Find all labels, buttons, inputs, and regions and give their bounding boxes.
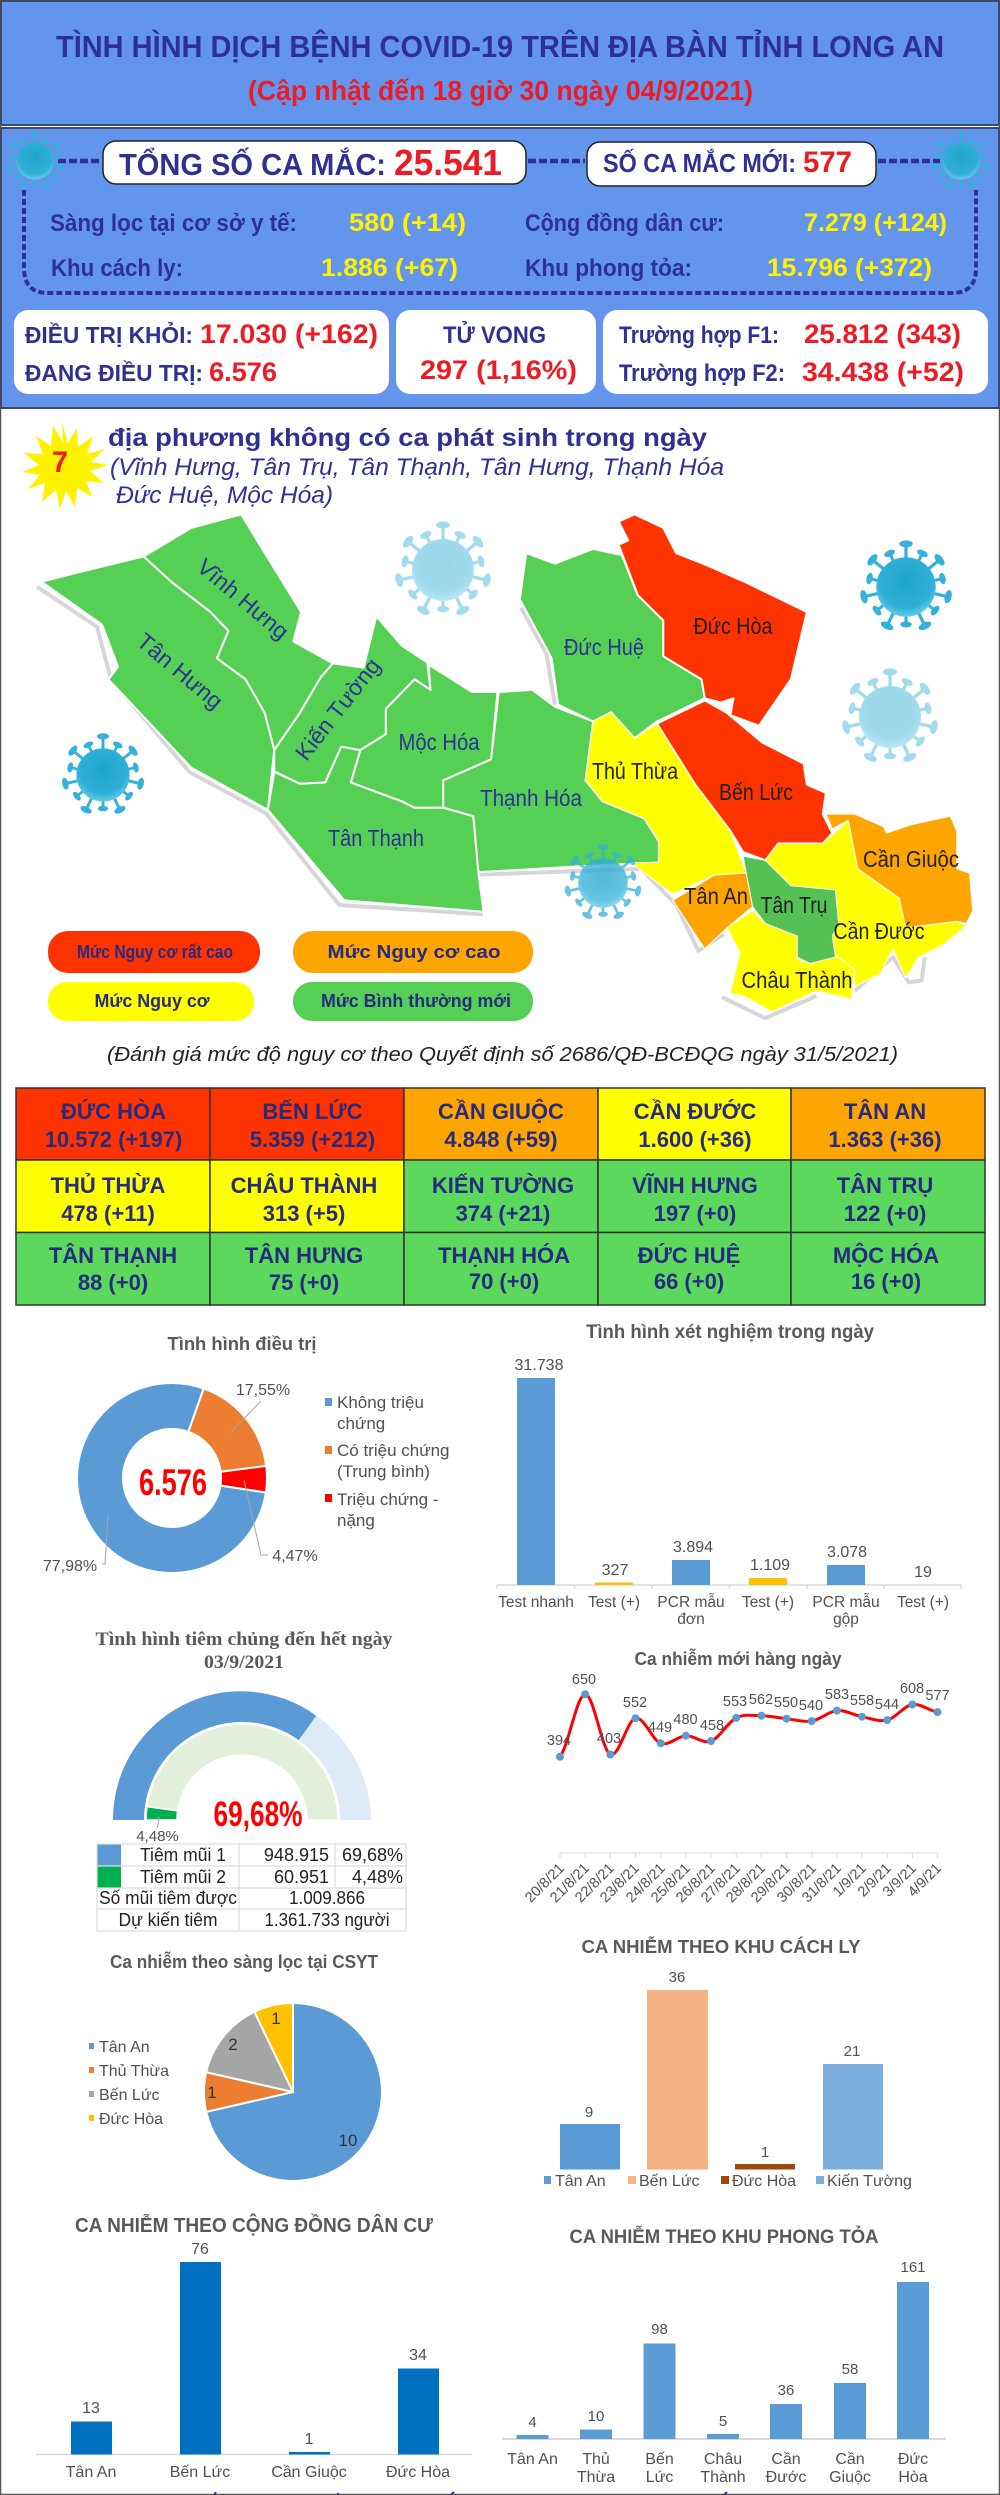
table: cases by locality: TÂN TRỤ [837,1173,933,1198]
chart title: CA NHIỄM THEO KHU CÁCH LY [582,1936,861,1957]
F1 F2 box: 34.438 (+52) [802,357,964,387]
chart: daily testing bars [497,1322,961,1628]
total cases box [103,141,526,184]
chart: vaccination gauge: 69,68% [214,1795,302,1834]
legend: Tân An [99,2039,150,2056]
chart: daily new cases line: 394 [547,1733,571,1749]
chart: daily testing bars: 1.109 [750,1557,790,1574]
icon: virus over map [564,844,642,920]
chart: lockdown area cases: 5 [719,2413,727,2430]
breakdown stats: 15.796 (+372) [767,254,932,282]
table: vaccination figures: 69,68% [342,1845,403,1865]
chart: lockdown area cases: Giuộc [829,2469,871,2486]
deaths box [396,310,596,394]
total cases box: TỔNG SỐ CA MẮC: [119,146,386,182]
legend: risk levels [48,931,533,1021]
heading: localities without new cases: địa phương không có ca phát sinh trong ngày [108,424,707,452]
table: cases by locality: CHÂU THÀNH [231,1173,377,1198]
legend: Bến Lức [99,2087,160,2104]
chart: daily new cases line: 458 [700,1718,724,1734]
map labels: Tân Trụ [760,892,828,918]
title: TÌNH HÌNH DỊCH BỆNH COVID-19 TRÊN ĐỊA BÀN TỈNH LONG AN [56,28,944,64]
chart: community cases: Tân An [66,2464,116,2481]
table: vaccination figures: 1.361.733 người [264,1910,390,1930]
table: cases by locality: KIẾN TƯỜNG [432,1173,574,1198]
map labels: Bến Lức [719,779,793,805]
chart: daily new cases line: 23/8/21 [597,1861,643,1906]
map labels: Châu Thành [742,967,852,993]
legend: Kiến Tường [827,2173,912,2190]
chart: treatment status donut: 4,47% [272,1548,318,1565]
table: vaccination figures: Tiêm mũi 1 [140,1845,226,1865]
table: cases by locality: 4.848 (+59) [444,1127,558,1152]
text: list of localities [110,454,724,509]
chart: daily new cases line: 552 [623,1695,647,1711]
legend: risk levels: Mức Nguy cơ rất cao [77,942,233,962]
chart: daily new cases line: 28/8/21 [723,1861,769,1906]
map labels: Tân An [684,883,748,909]
chart: daily new cases line: 558 [850,1693,874,1709]
table: cases by locality: MỘC HÓA [833,1243,939,1268]
chart: quarantine area cases: 9 [585,2104,593,2121]
deaths box: TỬ VONG [443,320,546,349]
legend [544,2173,912,2190]
legend: nặng [337,1511,375,1530]
chart: daily testing bars: Test (+) [588,1594,640,1611]
recovered box [14,310,389,394]
icon: star with number 7: 7 [52,446,68,479]
chart: lockdown area cases: Cần [771,2451,801,2468]
breakdown stats: Cộng đồng dân cư: [525,210,724,237]
region: Châu Thành [727,911,855,1012]
icon: virus light right [841,668,939,764]
chart: daily new cases line: 4/9/21 [905,1861,945,1900]
icon: virus dark left [61,733,145,815]
table: vaccination figures: Số mũi tiêm được [99,1888,237,1908]
table: vaccination figures [97,1844,406,1931]
chart: daily testing bars: 3.894 [673,1539,713,1556]
table: vaccination figures: Tiêm mũi 2 [140,1867,226,1887]
chart: quarantine area cases: 1 [761,2144,769,2161]
chart: vaccination gauge: 4,48% [136,1828,179,1845]
legend [89,2039,169,2128]
chart: screening cases pie: 1 [207,2083,217,2102]
deaths box: 297 (1,16%) [420,355,577,385]
recovered box: ĐIỀU TRỊ KHỎI: [25,320,193,348]
chart: community cases: Cần Giuộc [271,2464,347,2481]
new cases box: SỐ CA MẮC MỚI: [603,148,796,178]
table: cases by locality: 66 (+0) [654,1269,724,1294]
new cases box: 577 [803,146,852,179]
F1 F2 box: Trường hợp F1: [619,322,779,349]
map labels: Cần Đước [834,918,924,944]
table: cases by locality: 75 (+0) [269,1270,339,1295]
chart: lockdown area cases: 161 [900,2259,926,2276]
breakdown stats: 7.279 (+124) [804,209,947,237]
chart: lockdown area cases: 36 [778,2382,794,2399]
table: cases by locality: TÂN THẠNH [49,1243,177,1268]
chart: community cases: 13 [82,2400,100,2417]
chart: daily new cases line: 577 [925,1688,950,1704]
legend [325,1393,450,1530]
chart: lockdown area cases [502,2226,946,2486]
chart title: Ca nhiễm mới hàng ngày [634,1648,842,1669]
map of Long An [37,514,973,1018]
chart: lockdown area cases: 4 [528,2414,537,2431]
chart title [96,1630,393,1673]
table: cases by locality: 1.600 (+36) [638,1127,752,1152]
table: cases by locality: 10.572 (+197) [45,1127,182,1152]
legend: chứng [337,1414,385,1433]
chart: daily new cases line: 30/8/21 [774,1861,820,1906]
chart: quarantine area cases: 21 [844,2043,860,2060]
header panel [1,1,999,125]
table: cases by locality: 70 (+0) [469,1269,539,1294]
table: cases by locality: CẦN ĐƯỚC [634,1099,756,1124]
icon: virus light top [394,521,492,617]
chart: daily testing bars: 327 [602,1562,628,1579]
chart: daily new cases line: 583 [825,1687,849,1703]
chart title: CA NHIỄM THEO KHU PHONG TỎA [570,2226,879,2248]
chart: daily new cases line: 26/8/21 [673,1861,719,1906]
region: Cần Đước [765,820,966,987]
table: cases by locality: VĨNH HƯNG [632,1173,758,1198]
table: vaccination figures: 4,48% [352,1867,403,1887]
legend: risk levels: Mức Bình thường mới [321,991,511,1011]
region: Cần Giuộc [826,814,973,928]
table: cases by locality: TÂN AN [844,1099,926,1124]
chart: daily testing bars: đơn [677,1611,705,1628]
region: Thạnh Hóa [443,690,659,872]
region: Đức Hòa [619,514,807,726]
recovered box: ĐANG ĐIỀU TRỊ: [25,359,203,386]
chart: daily new cases line: 2/9/21 [855,1861,895,1900]
legend: Không triệu [337,1393,424,1412]
breakdown stats: Khu cách ly: [51,255,183,282]
map labels: Mộc Hóa [398,729,480,755]
chart: lockdown area cases: 58 [842,2361,858,2378]
table: cases by locality: 197 (+0) [654,1201,736,1226]
legend: Có triệu chứng [337,1441,450,1460]
chart: daily new cases line: 24/8/21 [623,1861,669,1906]
chart: daily testing bars: Test nhanh [498,1594,574,1611]
chart title: Ca nhiễm theo sàng lọc tại CSYT [110,1951,378,1972]
chart: daily new cases line: 562 [749,1692,773,1708]
breakdown stats [50,209,947,282]
legend: Tân An [555,2173,606,2190]
breakdown stats: 1.886 (+67) [321,254,458,282]
table: cases by locality: 1.363 (+36) [828,1127,942,1152]
text: list of localities: Đức Huệ, Mộc Hóa) [116,482,333,509]
map labels: Đức Hòa [694,613,773,639]
chart: daily new cases line: 1/9/21 [830,1861,870,1900]
chart: daily testing bars: Test (+) [742,1594,794,1611]
chart: lockdown area cases: 98 [651,2321,668,2338]
chart: daily new cases line: 27/8/21 [698,1861,744,1906]
F1 F2 box: 25.812 (343) [804,319,961,349]
table: cases by locality: TÂN HƯNG [245,1243,363,1268]
chart: treatment status donut: 17,55% [236,1382,290,1399]
chart: daily new cases line: 20/8/21 [522,1861,568,1906]
breakdown stats: Khu phong tỏa: [525,255,692,282]
chart: lockdown area cases: Bến [645,2451,674,2468]
chart: community cases: 76 [191,2241,209,2258]
table: cases by locality: 5.359 (+212) [250,1127,375,1152]
table: cases by locality: 16 (+0) [851,1269,921,1294]
recovered box: 17.030 (+162) [200,319,378,349]
chart: quarantine area cases: 36 [669,1969,685,1986]
chart: daily new cases line [522,1648,950,1906]
chart: treatment status donut: 6.576 [139,1462,207,1503]
region: Thủ Thừa [586,712,746,894]
chart: lockdown area cases: Hòa [898,2469,928,2486]
chart title: Tình hình xét nghiệm trong ngày [586,1322,874,1343]
recovered box: 6.576 [209,357,277,387]
subtitle: (Cập nhật đến 18 giờ 30 ngày 04/9/2021) [248,75,753,106]
region: Vĩnh Hưng [144,514,333,750]
chart: community cases [36,2213,472,2481]
chart: treatment status donut: 77,98% [43,1558,97,1575]
table: cases by locality: 88 (+0) [78,1270,148,1295]
chart: lockdown area cases: Cần [835,2451,865,2468]
chart: treatment status donut [43,1334,450,1575]
F1 F2 box: Trường hợp F2: [619,360,785,387]
chart: lockdown area cases: Châu [704,2451,742,2468]
chart title: 03/9/2021 [204,1653,284,1673]
chart: screening cases pie: 1 [271,2009,281,2028]
map labels: Kiến Tường [290,653,386,765]
icon: virus right [932,132,990,189]
chart: lockdown area cases: Đức [898,2451,928,2468]
table: cases by locality: ĐỨC HÒA [61,1099,166,1124]
chart: community cases: Đức Hòa [386,2464,450,2481]
region: Tân Hưng [41,556,274,810]
chart: lockdown area cases: 10 [588,2408,604,2425]
chart: lockdown area cases: Đước [766,2469,806,2486]
chart: daily new cases line: 403 [597,1731,621,1747]
chart: quarantine area cases [544,1936,912,2190]
table: vaccination figures: 1.009.866 [289,1888,365,1908]
table: cases by locality: THỦ THỪA [51,1173,166,1198]
region: Kiến Tường [274,616,431,784]
chart title: Tình hình tiêm chủng đến hết ngày [96,1630,393,1650]
table: vaccination figures: Dự kiến tiêm [118,1910,218,1930]
table: cases by locality: 122 (+0) [844,1201,926,1226]
new cases box [587,142,876,186]
table: cases by locality [16,1088,985,1305]
chart: daily new cases line: 553 [723,1694,747,1710]
legend: Bến Lức [639,2173,700,2190]
map labels [132,553,959,993]
map labels: Tân Hưng [132,628,228,714]
chart title: CA NHIỄM THEO CỘNG ĐỒNG DÂN CƯ [75,2213,433,2237]
table: cases by locality: THẠNH HÓA [438,1243,570,1268]
table: cases by locality: ĐỨC HUỆ [638,1243,740,1268]
chart: daily new cases line: 480 [673,1712,698,1728]
region: Tân Trụ [743,856,839,963]
icon: virus dark right [859,540,953,632]
map labels: Cần Giuộc [863,846,959,872]
chart: screening cases pie: 10 [339,2131,357,2150]
region: Đức Huệ [520,549,705,738]
chart: community cases: 1 [305,2431,314,2448]
chart: lockdown area cases: Thủ [582,2451,610,2468]
chart: screening cases pie: 2 [228,2035,238,2054]
total cases box: 25.541 [394,142,502,183]
table: cases by locality: 313 (+5) [263,1201,345,1226]
chart: daily testing bars: gộp [833,1611,859,1628]
chart: daily new cases line: 449 [648,1720,672,1736]
table: cases by locality: 478 (+11) [61,1201,155,1226]
chart title: Tình hình điều trị [168,1334,316,1354]
legend: Thủ Thừa [99,2063,169,2080]
chart: daily new cases line: 550 [774,1695,798,1711]
chart: daily new cases line: 544 [875,1697,899,1713]
chart: daily new cases line: 650 [572,1672,596,1688]
map labels: Đức Huệ [564,634,644,660]
region: Tân Thạnh [268,747,483,912]
region: Mộc Hóa [351,665,497,808]
chart: daily new cases line: 608 [900,1681,924,1697]
table: vaccination figures: 948.915 [264,1845,329,1865]
chart: daily new cases line: 31/8/21 [799,1861,845,1906]
legend: Triệu chứng - [337,1490,438,1509]
map labels: Tân Thạnh [328,825,424,851]
breakdown stats: 580 (+14) [349,209,466,237]
chart: daily new cases line: 25/8/21 [648,1861,694,1906]
chart: screening cases pie [89,1951,382,2181]
region: Bến Lức [657,700,832,860]
table: cases by locality: CẦN GIUỘC [438,1099,564,1124]
text: list of localities: (Vĩnh Hưng, Tân Trụ, Tân Thạnh, Tân Hưng, Thạnh Hóa [110,454,724,481]
chart: daily new cases line: 3/9/21 [880,1861,920,1900]
chart: lockdown area cases: Lức [646,2469,673,2486]
map labels: Vĩnh Hưng [192,553,294,645]
chart: lockdown area cases: Thành [700,2469,746,2486]
table: cases by locality: BẾN LỨC [262,1099,363,1124]
table: cases by locality: 374 (+21) [456,1201,550,1226]
legend: risk levels: Mức Nguy cơ [94,991,210,1011]
chart: vaccination gauge [96,1630,393,1845]
chart: daily new cases line: 540 [799,1698,823,1714]
map shadow [37,587,925,1018]
map labels: Thủ Thừa [592,758,678,784]
breakdown stats: Sàng lọc tại cơ sở y tế: [50,210,297,237]
chart: community cases: 34 [409,2347,427,2364]
icon: star with number 7 [22,423,108,509]
F1 F2 box [603,310,988,394]
chart: lockdown area cases: Thừa [577,2469,615,2486]
caption: risk assessment note: (Đánh giá mức độ nguy cơ theo Quyết định số 2686/QĐ-BCĐQG ngày 31/5/2021) [107,1044,898,1066]
chart: daily new cases line: 29/8/21 [748,1861,794,1906]
legend: (Trung bình) [337,1462,430,1481]
region: Tân An [673,873,753,949]
chart: lockdown area cases: Tân An [507,2451,558,2468]
chart: daily testing bars: 19 [914,1564,932,1581]
chart: daily testing bars: PCR mẫu [812,1594,880,1611]
chart: daily testing bars: Test (+) [897,1594,949,1611]
chart: daily testing bars: 3.078 [827,1544,867,1561]
chart: daily new cases line: 22/8/21 [572,1861,618,1906]
legend: risk levels: Mức Nguy cơ cao [328,942,500,962]
panel: summary [1,128,999,408]
chart: daily new cases line: 21/8/21 [547,1861,593,1906]
chart: daily testing bars: 31.738 [515,1357,564,1374]
table: vaccination figures: 60.951 [274,1867,329,1887]
icon: virus left [6,132,64,189]
chart: daily testing bars: PCR mẫu [657,1594,725,1611]
map labels: Thạnh Hóa [480,785,582,811]
legend: Đức Hòa [99,2111,163,2128]
legend: Đức Hòa [732,2173,796,2190]
chart: community cases: Bến Lức [170,2464,230,2481]
clipped marks at page bottom [214,2492,727,2495]
